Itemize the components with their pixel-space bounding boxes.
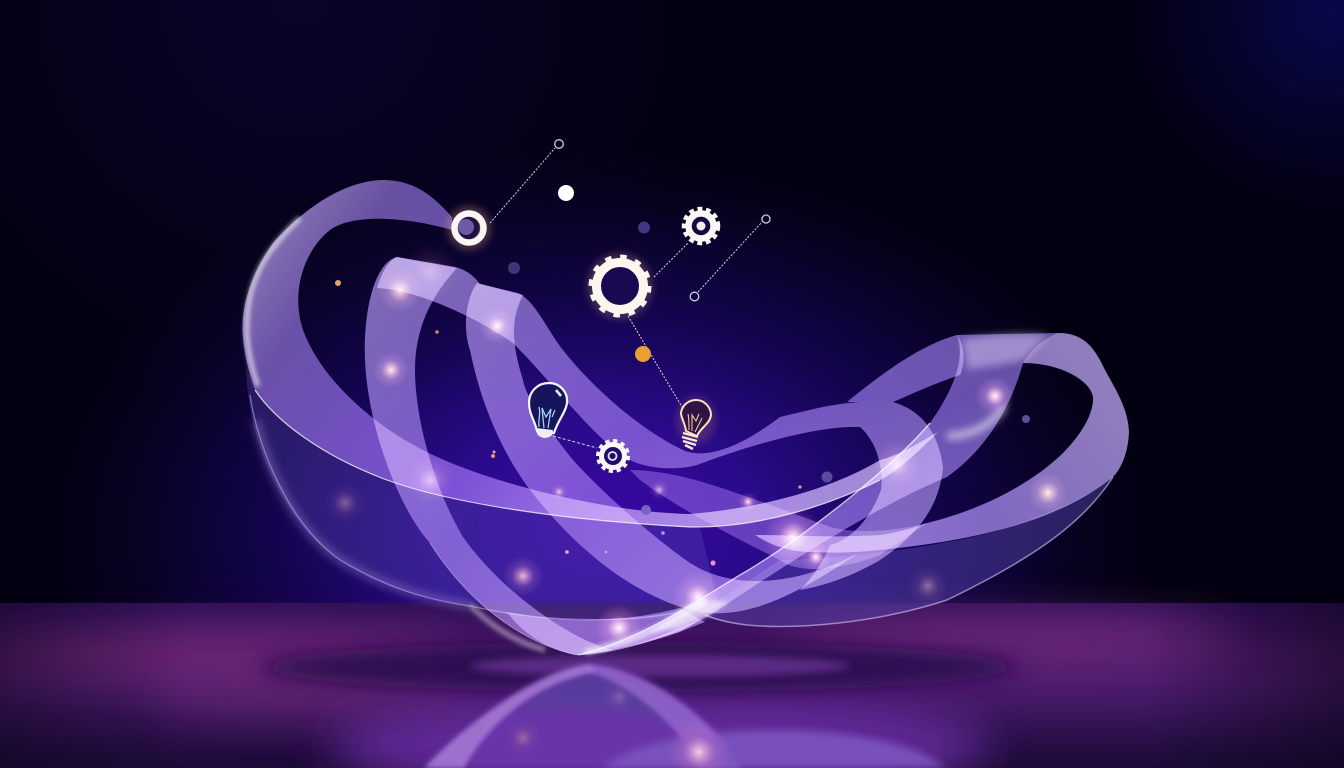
ribbon: inner loop [466,283,860,613]
ribbon: bottom band [507,608,705,655]
ribbon: lower band [630,470,927,569]
ribbon: right loop [755,333,1129,553]
icon: small gear bottom [598,441,628,471]
node circles [555,140,770,301]
ribbon: big left hook [242,180,938,527]
ribbon: bright bottom twist [650,600,730,632]
icon: light bulb warm [676,396,716,449]
light points [325,244,1068,652]
ribbon: upper right fold [847,335,963,402]
icon: large gear [587,253,653,319]
ribbon reflection [424,664,946,768]
reflective floor [0,603,1344,768]
icon: light bulb blue [529,383,567,438]
ribbon: middle loop [365,257,700,655]
floor shadow [260,642,1020,692]
icon: small gear top [684,209,718,243]
solid dots [508,185,651,362]
lower bowl right [700,477,1113,626]
particles [335,280,1030,566]
lower bowl left [246,368,720,620]
ribbon: central band [377,257,943,590]
icon: ring [447,206,491,250]
ribbon: rising strand [578,333,1057,655]
connector lines [490,148,762,448]
